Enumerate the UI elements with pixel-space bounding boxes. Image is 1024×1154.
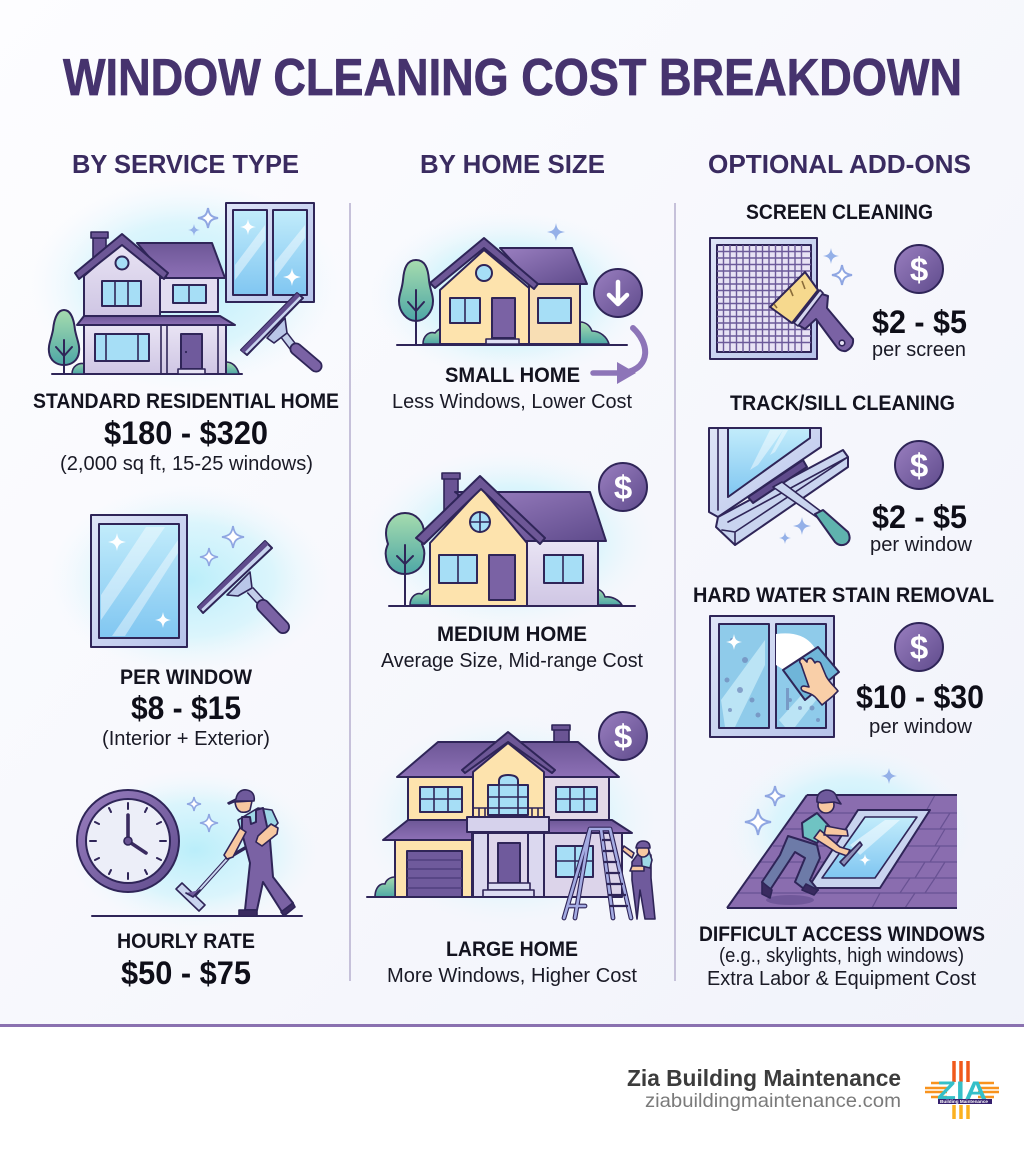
text: difficult access windows: Extra Labor & Equipment Cost: [707, 968, 976, 990]
text: large home: LARGE HOME: [446, 938, 578, 961]
icon: dollar coin: $: [614, 718, 632, 755]
price: hard water stain removal: per window: [869, 716, 973, 738]
text: per window: PER WINDOW: [120, 666, 252, 689]
text: standard residential home: STANDARD RESIDENTIAL HOME: [33, 390, 339, 413]
text: hourly rate: $50 - $75: [121, 955, 251, 991]
column dividers: [350, 203, 675, 981]
icon: down arrow coin: [594, 269, 642, 317]
footer: company name: Zia Building Maintenance: [627, 1065, 901, 1091]
icon: dollar coin: $: [910, 447, 928, 484]
price: track/sill cleaning: per window: [870, 534, 973, 556]
icon: dollar coin: [599, 712, 647, 760]
price: screen cleaning: [872, 304, 967, 361]
text: difficult access windows: (e.g., skylights, high windows): [719, 945, 964, 967]
illustration: medium home: [365, 450, 655, 630]
footer: website: ziabuildingmaintenance.com: [645, 1090, 901, 1112]
subheading: screen cleaning: SCREEN CLEANING: [746, 201, 933, 224]
text: medium home: [381, 623, 643, 672]
logo: Zia symbol: ZIA: [937, 1077, 987, 1105]
price: track/sill cleaning: $2 - $5: [872, 499, 967, 535]
text: per window: $8 - $15: [131, 690, 241, 726]
logo: Zia symbol: Building Maintenance: [940, 1099, 989, 1104]
illustration: standard house with window and squeegee: [30, 180, 340, 390]
price: screen cleaning: $2 - $5: [872, 304, 967, 340]
illustration: screen and brush: [710, 238, 853, 359]
icon: ladder: [564, 829, 631, 918]
panel: optional add-ons: [693, 149, 994, 990]
text: difficult access windows: [699, 923, 985, 990]
panel: by home size: [360, 149, 660, 987]
illustration: clock and worker: [70, 770, 320, 930]
text: per window: (Interior + Exterior): [102, 728, 270, 750]
text: standard residential home: (2,000 sq ft, 15-25 windows): [60, 453, 313, 475]
price: track/sill cleaning: [870, 499, 973, 556]
text: per window: [102, 666, 270, 750]
panel: by service type: [30, 149, 340, 991]
icon: dollar coin: $: [910, 251, 928, 288]
icon: worker: [622, 841, 655, 919]
price: hard water stain removal: [856, 679, 984, 738]
logo: Zia symbol: [925, 1061, 999, 1119]
footer: [0, 1024, 1024, 1154]
price: hard water stain removal: $10 - $30: [856, 679, 984, 715]
subheading: track/sill cleaning: TRACK/SILL CLEANING: [730, 392, 955, 415]
icon: dollar coin: $: [614, 469, 632, 506]
text: medium home: Average Size, Mid-range Cost: [381, 650, 643, 672]
text: small home: SMALL HOME: [445, 364, 580, 387]
icon: dollar coin: [895, 623, 943, 671]
text: difficult access windows: DIFFICULT ACCESS WINDOWS: [699, 923, 985, 946]
illustration: large home with ladder and worker: [360, 712, 660, 925]
text: standard residential home: [33, 390, 339, 475]
icon: dollar coin: [599, 463, 647, 511]
text: large home: More Windows, Higher Cost: [387, 965, 637, 987]
text: small home: Less Windows, Lower Cost: [392, 391, 632, 413]
illustration: hard water stain window and cloth: [710, 616, 839, 737]
icon: dollar coin: [895, 245, 943, 293]
illustration: roof skylight and worker: [725, 745, 975, 915]
illustration: single window and squeegee: [50, 485, 330, 675]
heading: by home size: BY HOME SIZE: [420, 149, 605, 179]
illustration: window sill and squeegee: [709, 428, 850, 545]
text: large home: [387, 938, 637, 987]
illustration: small home: [370, 210, 650, 384]
text: standard residential home: $180 - $320: [104, 415, 268, 451]
subheading: hard water stain removal: HARD WATER STAIN REMOVAL: [693, 584, 994, 607]
icon: dollar coin: $: [910, 629, 928, 666]
text: medium home: MEDIUM HOME: [437, 623, 587, 646]
text: small home: [392, 364, 632, 413]
heading: optional add-ons: OPTIONAL ADD-ONS: [708, 149, 971, 179]
text: hourly rate: HOURLY RATE: [117, 930, 255, 953]
heading: by service type: BY SERVICE TYPE: [72, 149, 299, 179]
icon: dollar coin: [895, 441, 943, 489]
text: hourly rate: [117, 930, 255, 991]
arrow: curved downward: [593, 328, 645, 384]
price: screen cleaning: per screen: [872, 339, 966, 361]
